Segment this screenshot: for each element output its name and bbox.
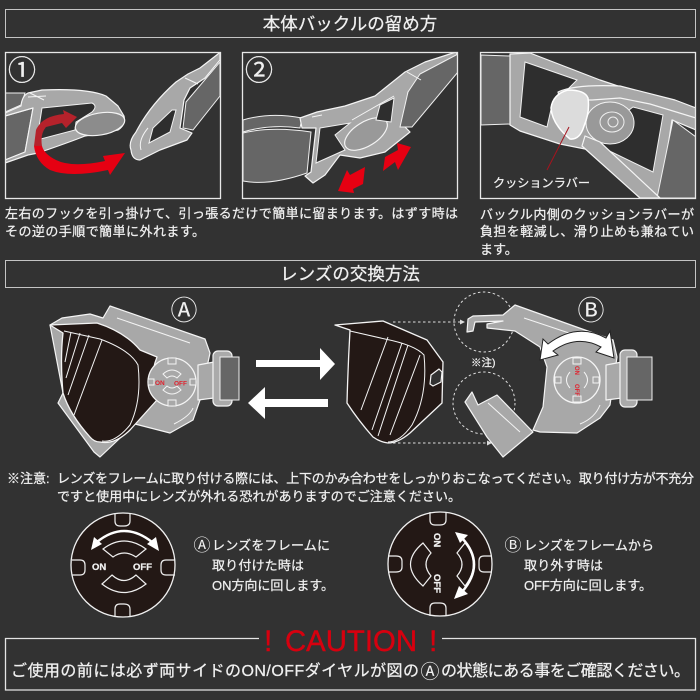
text: A instruction — [194, 536, 334, 593]
arrow: to left — [248, 387, 328, 419]
text: B instruction — [504, 536, 654, 593]
text: caution message: ご使用の前には必ず両サイドのON/OFFダイヤルが図の — [11, 662, 419, 680]
dial: goggle B: OFF — [573, 384, 579, 396]
note mark: ※注) — [471, 356, 496, 369]
text: B instruction: 取り外す時は — [524, 558, 603, 573]
dial diagram: ON: OFF — [133, 562, 152, 573]
dial diagram: OFF: OFF — [431, 574, 442, 593]
dial: goggle A — [148, 358, 196, 406]
text: A instruction: 取り付けた時は — [212, 558, 304, 573]
step number 2: ② — [245, 55, 273, 86]
text: caution note: レンズをフレームに取り付ける際には、上下のかみ合わせをしっかりおこなってください。取り付け方が不充分 — [57, 471, 694, 486]
text: B instruction: Ⓑ — [504, 536, 522, 555]
callout: cushion rubber: クッションラバー — [493, 176, 590, 190]
illustration: lens only — [335, 321, 443, 443]
text: A instruction: Ⓐ — [194, 536, 210, 555]
illustration: goggle A — [50, 306, 239, 457]
dial diagram: ON — [71, 513, 175, 617]
dial diagram: ON: ON — [92, 562, 106, 573]
dial: goggle A: OFF — [174, 380, 187, 388]
heading: caution: CAUTION — [285, 625, 417, 658]
text: caution note: ※注意: — [7, 471, 50, 486]
step number 1: ① — [8, 55, 36, 86]
text: cushion description: 負担を軽減し、滑り止めも兼ねてい — [480, 224, 694, 239]
text: caution message — [11, 661, 690, 683]
heading: caution: ! — [429, 625, 437, 658]
heading: buckle section — [6, 10, 696, 38]
panel: cushion rubber — [480, 52, 696, 198]
heading: caution: ! — [264, 625, 272, 658]
callouts: dashed connectors — [393, 292, 515, 446]
dial: goggle A: ON — [155, 380, 165, 387]
text: cushion description: ます。 — [480, 242, 518, 257]
label: B: Ⓑ — [578, 296, 604, 326]
text: B instruction: レンズをフレームから — [524, 538, 654, 553]
arrow: to right — [256, 348, 335, 380]
heading: buckle section: 本体バックルの留め方 — [263, 14, 437, 34]
text: B instruction: OFF方向に回します。 — [524, 578, 652, 593]
dial: goggle B — [554, 357, 600, 403]
illustration: goggle B frame — [465, 305, 652, 457]
heading: lens section — [6, 260, 696, 288]
dial diagram: OFF: ON — [431, 533, 442, 547]
heading: lens section: レンズの交換方法 — [280, 264, 420, 284]
text: caution message: Ⓐ — [420, 661, 440, 683]
panel: step 1 — [5, 52, 220, 198]
label: A: Ⓐ — [170, 296, 198, 326]
arrow: rotation — [540, 331, 614, 360]
text: A instruction: ON方向に回します。 — [212, 578, 334, 593]
text: cushion description: バックル内側のクッションラバーが — [480, 207, 694, 222]
panel: step 2 — [242, 52, 458, 198]
text: caution message: の状態にある事をご確認ください。 — [441, 662, 690, 680]
dial diagram: OFF — [388, 512, 492, 616]
panel: caution — [6, 625, 696, 690]
text: A instruction: レンズをフレームに — [212, 538, 330, 553]
text: steps description: 左右のフックを引っ掛けて、引っ張るだけで簡単に留まります。はずす時は — [5, 206, 458, 221]
dial: goggle B: ON — [573, 366, 579, 375]
text: caution note: ですと使用中にレンズが外れる恐れがありますのでご注意ください。 — [57, 489, 461, 504]
text: steps description: その逆の手順で簡単に外れます。 — [5, 224, 205, 239]
